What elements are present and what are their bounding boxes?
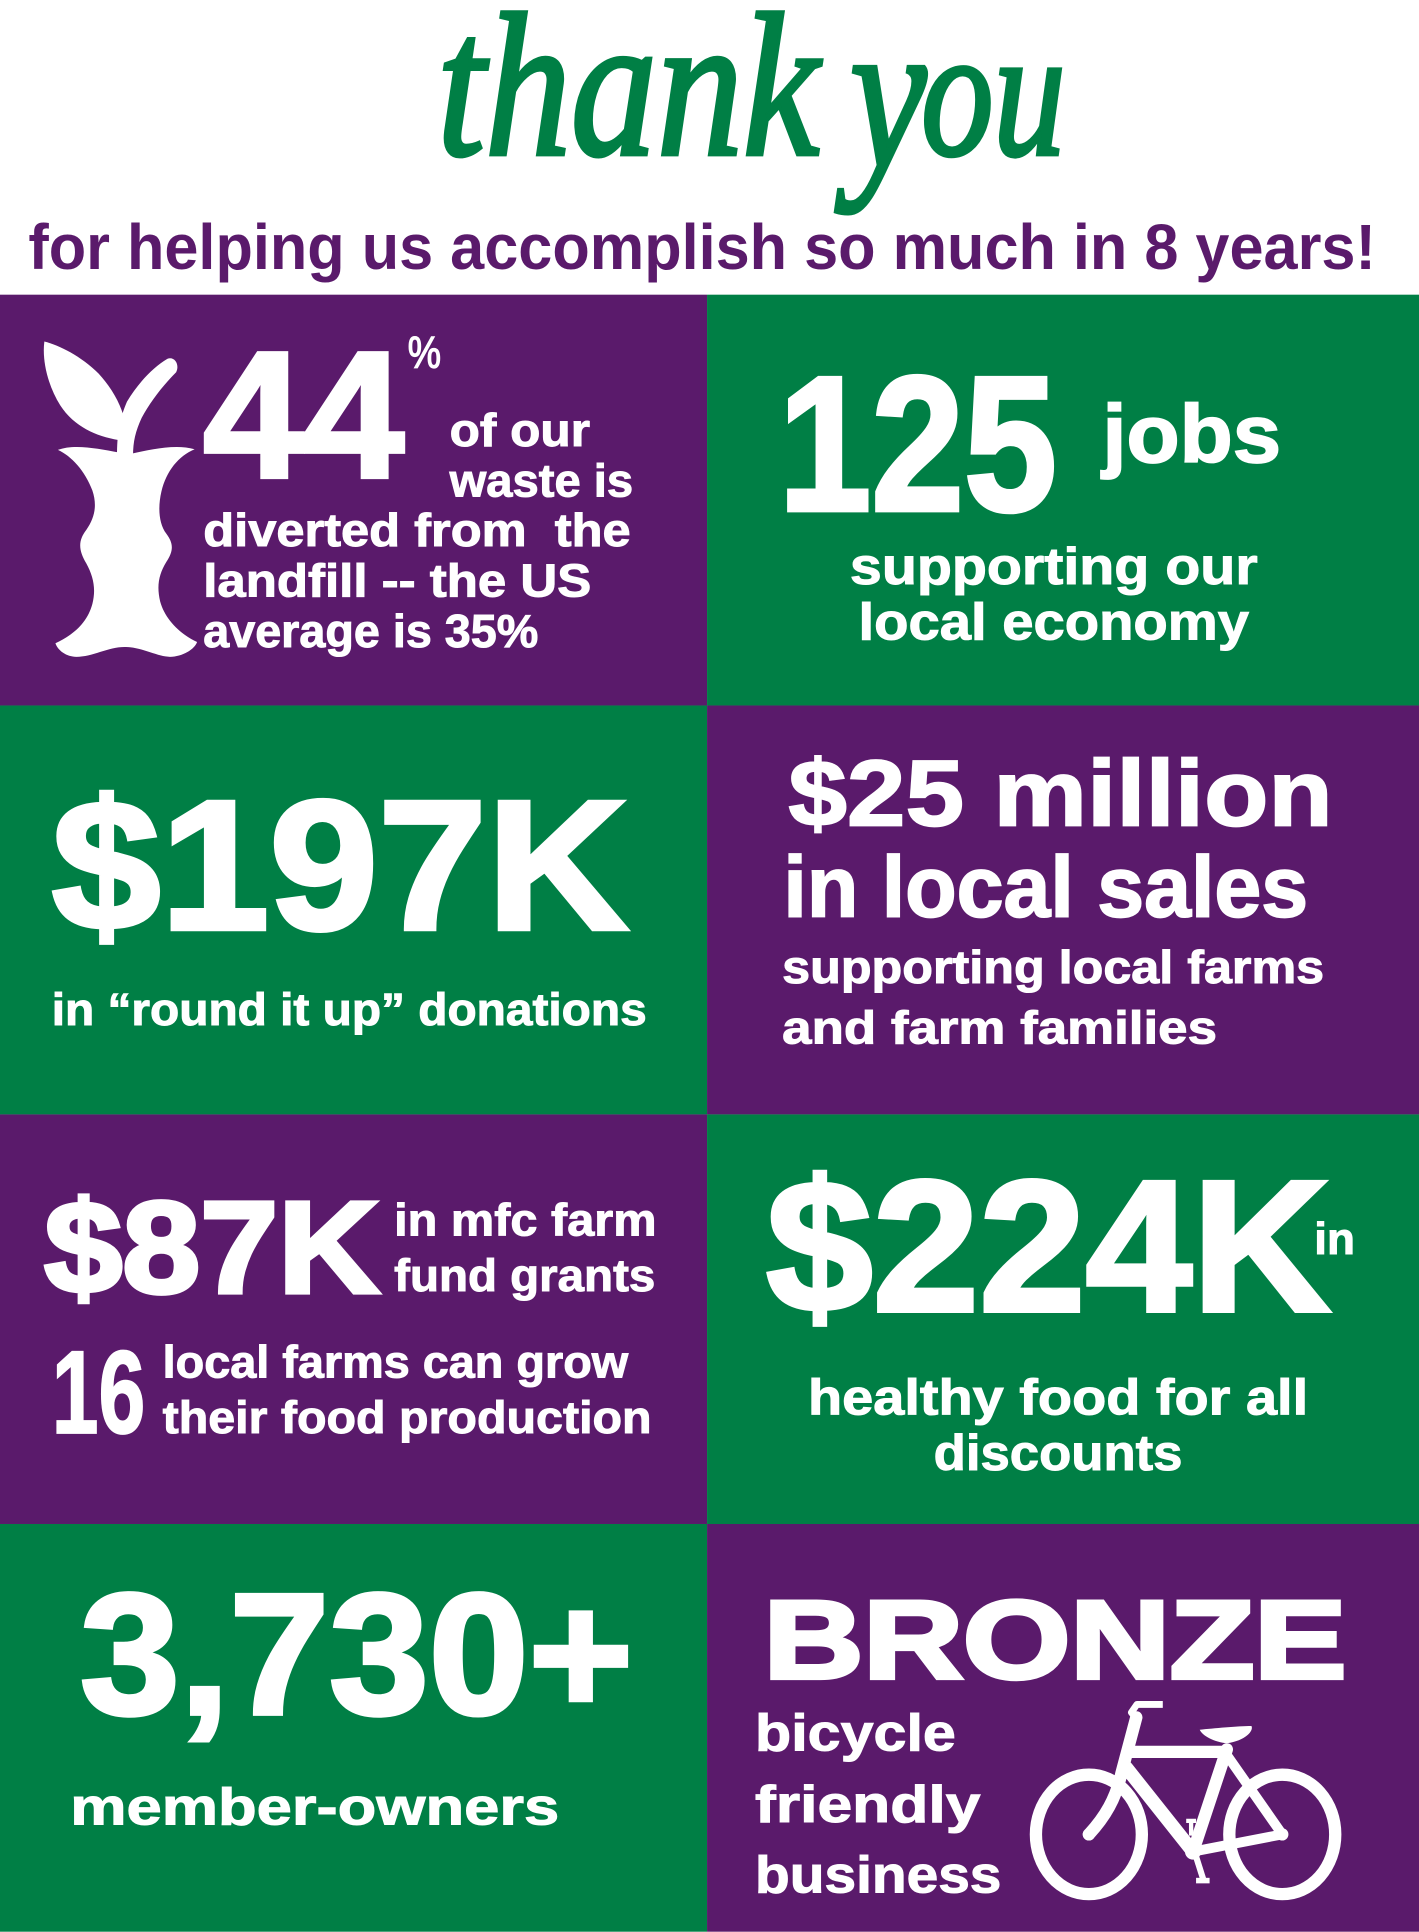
stat: $197K: $197K [52,763,628,969]
text: member-owners: member-owners [70,1778,559,1836]
text: local farms can grow: their food production [163,1392,652,1443]
text: bicycle friendly business [755,1704,1001,1903]
stat: $87K: $87K [44,1174,379,1320]
icon: bicycle [1036,1704,1335,1894]
text: supporting local farms: supporting local farms [782,941,1324,993]
text: supporting our local economy: local economy [859,593,1249,651]
icon: apple core [44,341,197,657]
panel: $87K farm fund grants [0,1114,707,1524]
text: healthy food for all discounts: discounts [934,1424,1182,1481]
text: of our waste is diverted: diverted from the [203,504,631,556]
text: supporting local farms: and farm families [782,1002,1217,1054]
text: local farms can grow: local farms can grow [163,1336,629,1387]
panel: $197K donations [0,705,707,1114]
text: in mfc farm fund grants: fund grants [394,1250,655,1301]
text: of our waste is diverted: landfill -- the US [203,554,591,606]
stat: 16: 16 [52,1327,145,1459]
text: in mfc farm fund grants [394,1195,657,1301]
text: round it up donations: in “round it up” donations [52,984,647,1035]
text: of our waste is diverted [203,404,633,657]
stat: in local sales: in local sales [783,840,1308,936]
text: of our waste is diverted: waste is [449,455,633,507]
stat: 3,730+: 3,730+ [80,1558,633,1751]
text: of our waste is diverted: average is 35% [203,605,538,657]
text: supporting our local economy [850,537,1258,651]
panel: $224K healthy food [707,1114,1419,1524]
text: supporting local farms [782,941,1324,1054]
text: healthy food for all discounts [808,1368,1308,1481]
text: healthy food for all discounts: healthy food for all [808,1368,1308,1425]
panel: bronze bicycle friendly business [707,1524,1419,1932]
text: local farms can grow [163,1336,652,1443]
label: jobs: jobs [1100,389,1281,480]
stat: 44: 44 [203,315,404,516]
text: in mfc farm fund grants: in mfc farm [394,1195,657,1246]
panel: 3,730+ member-owners [0,1524,707,1932]
label: in: in [1314,1215,1355,1264]
stat: BRONZE: BRONZE [764,1579,1346,1702]
title: thank you [437,0,1065,214]
stat: $224K: $224K [766,1142,1330,1351]
stat: $25 million: $25 million [788,741,1333,846]
text: bicycle friendly business: friendly [755,1775,981,1833]
text: supporting our local economy: supporting our [850,537,1258,595]
subtitle: for helping us accomplish so much in 8 years! [28,211,1376,283]
percent sign: % [408,328,441,377]
text: of our waste is diverted: of our [450,404,590,456]
panel: 44% waste diverted [0,295,707,705]
text: bicycle friendly business: business [755,1845,1001,1903]
panel: 125 jobs [707,295,1419,705]
stat: 125: 125 [778,336,1057,551]
panel: $25 million local sales [707,705,1419,1114]
text: bicycle friendly business: bicycle [755,1704,956,1762]
